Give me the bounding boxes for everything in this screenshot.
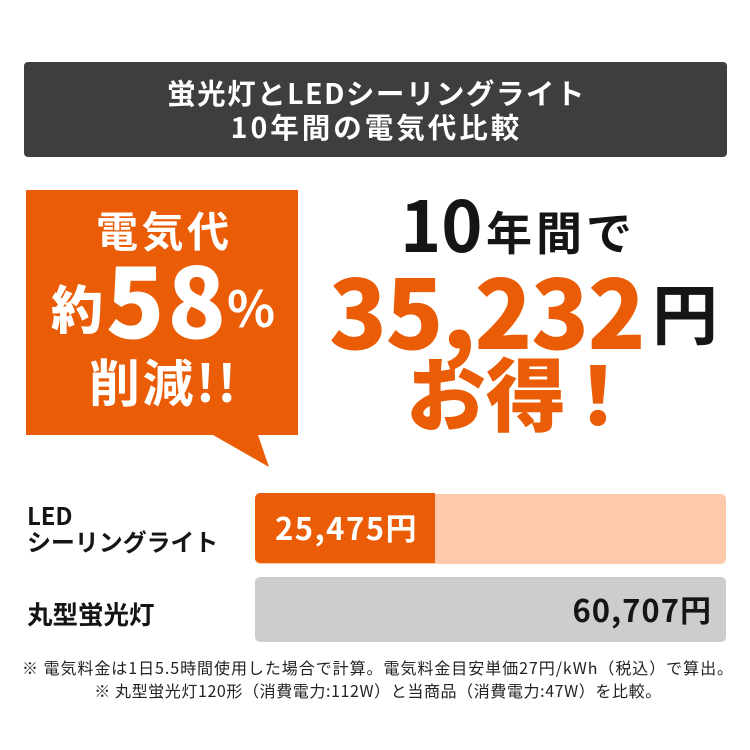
bar label: fluorescent: 丸型蛍光灯 xyxy=(27,595,155,632)
headline amount xyxy=(329,240,718,377)
bar label: LED: LED xyxy=(27,497,72,532)
bar: fluorescent xyxy=(255,577,726,642)
callout bubble xyxy=(26,190,298,467)
title text: 10年間の電気代比較 xyxy=(231,106,522,147)
number 10: 10 xyxy=(400,172,483,273)
footnote: ※ 電気料金は1日5.5時間使用した場合で計算。電気料金目安単価27円/kWh（税込）で算出。 xyxy=(22,655,734,679)
years text: 年間で xyxy=(486,198,636,264)
bar label: LED xyxy=(27,497,218,558)
bar: LED total xyxy=(255,494,726,564)
callout line 1: 電気代 xyxy=(96,199,233,260)
percent sign: % xyxy=(227,270,275,342)
amount digits: 35,232 xyxy=(329,240,644,377)
headline line 3 xyxy=(406,333,638,449)
bar label: LED: シーリングライト xyxy=(27,523,218,558)
footnote xyxy=(22,655,734,702)
title banner xyxy=(24,62,727,157)
kanji: approx: 約 xyxy=(51,269,103,344)
callout: 58% reduction xyxy=(26,190,298,467)
LED amount: 25,475円 xyxy=(275,504,418,549)
bar: LED value xyxy=(255,493,435,563)
callout line 3: 削減!! xyxy=(89,343,239,417)
footnote: ※ 丸型蛍光灯120形（消費電力:112W）と当商品（消費電力:47W）を比較。 xyxy=(94,678,662,702)
callout line 2 xyxy=(51,227,275,366)
yen sign: 円 xyxy=(652,263,718,359)
number 58: 58 xyxy=(106,227,229,366)
fluorescent amount: 60,707円 xyxy=(572,586,712,631)
otoku text: お得 xyxy=(406,333,566,449)
title text: 蛍光灯とLEDシーリングライト xyxy=(167,72,586,113)
title text xyxy=(167,72,586,147)
headline line 1 xyxy=(400,172,636,273)
exclamation mark: ！ xyxy=(558,333,638,449)
headline: savings xyxy=(329,172,718,449)
